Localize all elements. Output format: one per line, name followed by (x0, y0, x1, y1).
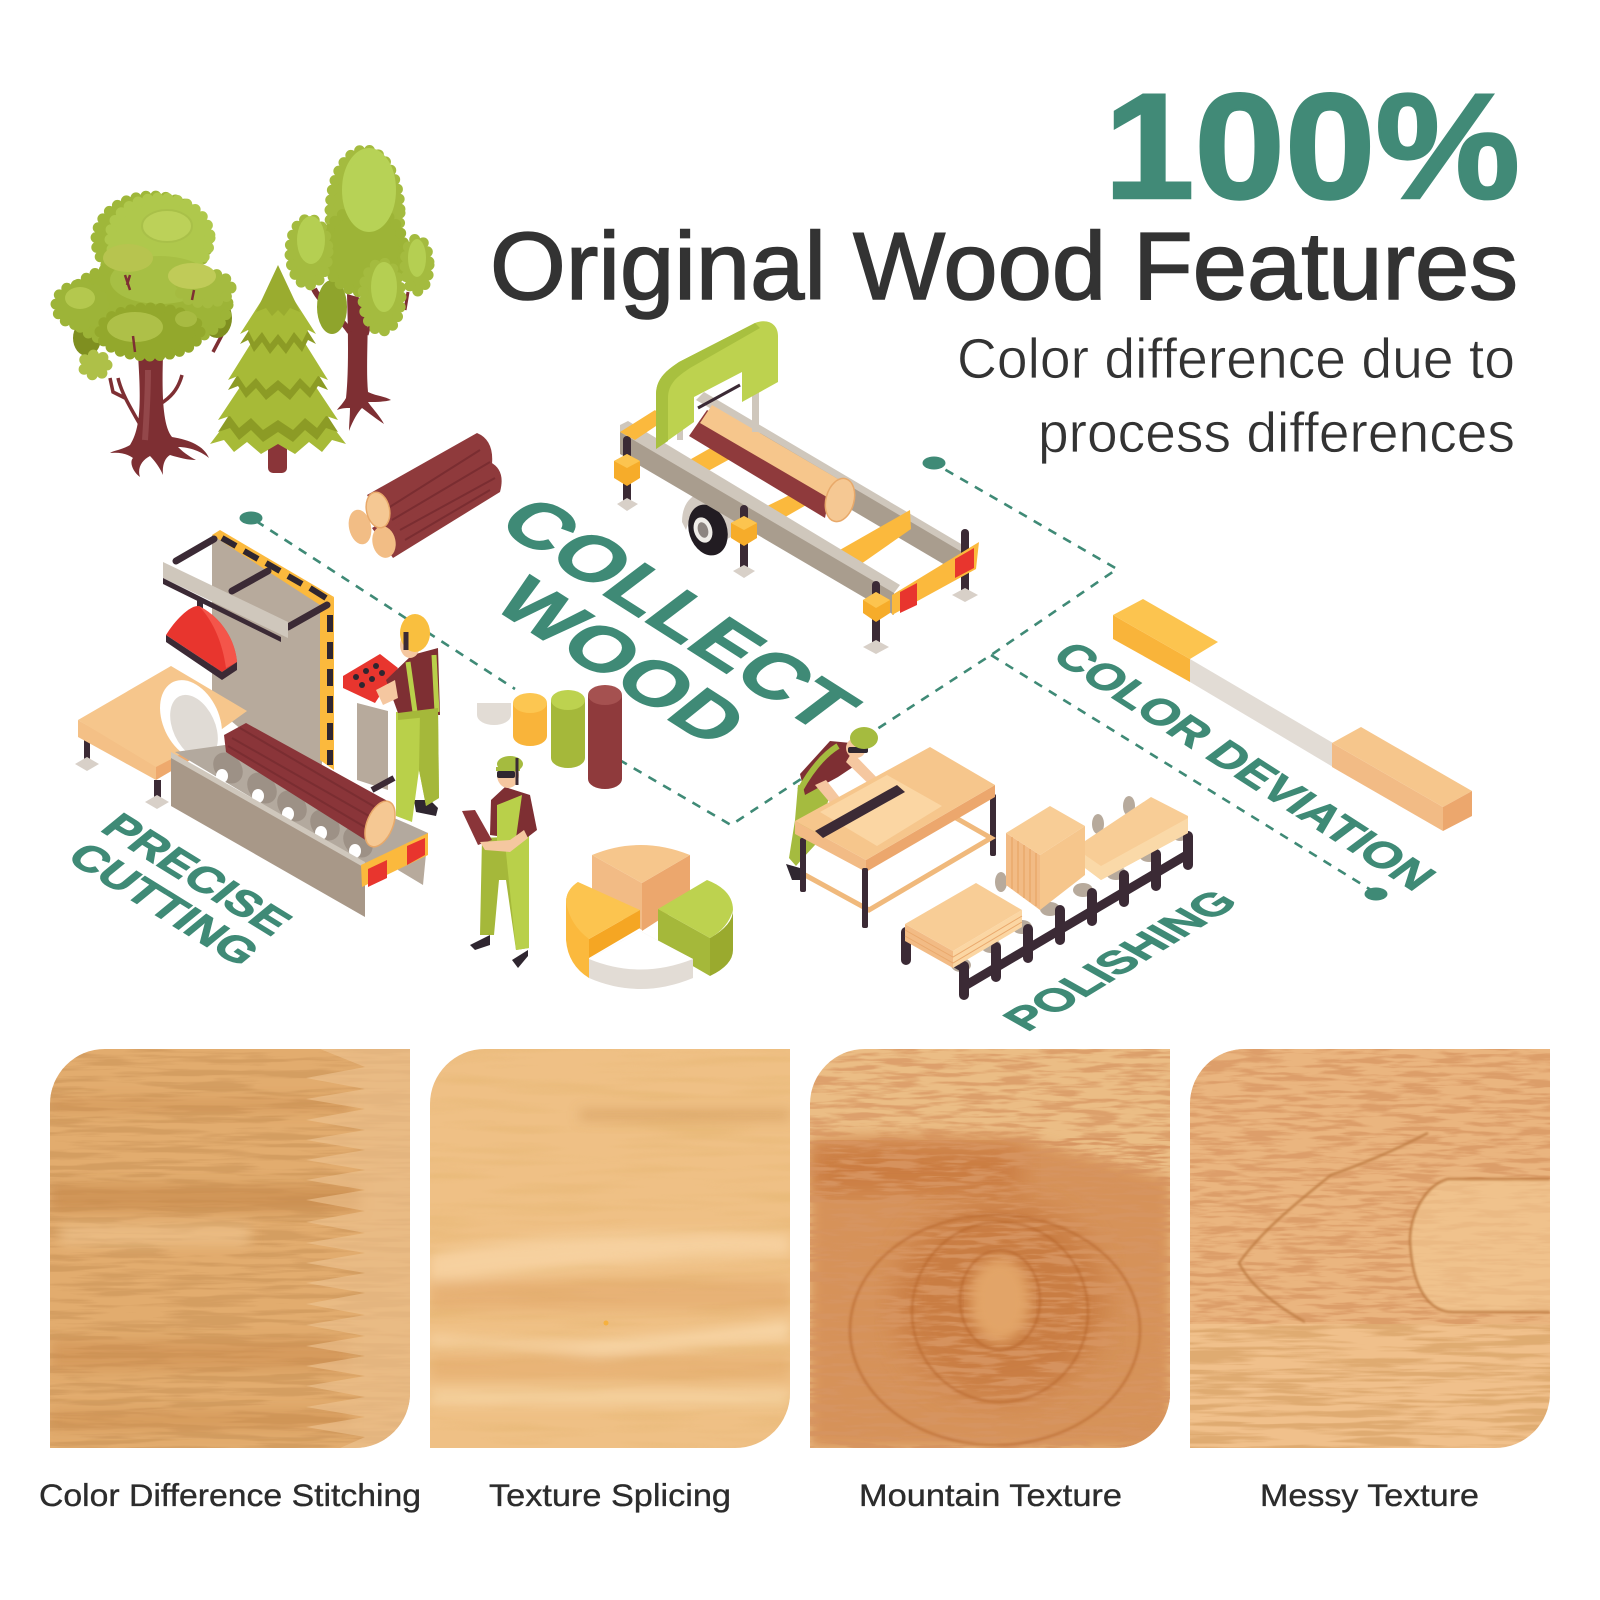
icon: inspector with clipboard (462, 756, 537, 968)
conveyor (398, 828, 428, 885)
icon: cutting machine (75, 530, 428, 917)
rear end panel (892, 542, 979, 615)
legs and brackets (623, 436, 631, 504)
tall stack (1006, 833, 1040, 910)
icon: stacked logs (346, 433, 502, 560)
icon: cylinder bars (477, 685, 622, 789)
subheading text: process differences (1038, 401, 1515, 465)
icon: colour deviation bar (1113, 599, 1472, 831)
tower (212, 535, 332, 795)
red hood (197, 600, 203, 614)
posts (677, 400, 683, 440)
panel: texture splicing (430, 1049, 790, 1448)
subheading text (957, 327, 1515, 465)
icon: back tree (290, 150, 429, 431)
icon: 3D pie chart (566, 845, 733, 989)
log on conveyor (224, 723, 393, 841)
panel: color difference stitching (50, 1049, 410, 1448)
label: precise cutting: CUTTING (58, 836, 269, 974)
icon: mobile sawmill (614, 321, 979, 654)
icon: worker at table (786, 727, 884, 880)
panel: messy texture (1190, 1049, 1550, 1448)
label: collect wood: COLLECT (481, 484, 877, 744)
caption: messy texture: Messy Texture (1260, 1477, 1479, 1513)
front rail (620, 430, 894, 615)
headline: 100%: 100% (1104, 62, 1520, 230)
caption: color difference stitching: Color Difference Stitching (39, 1477, 421, 1513)
log with plank (689, 410, 832, 518)
label: color deviation: COLOR DEVIATION (1042, 634, 1446, 898)
caption: texture splicing: Texture Splicing (489, 1477, 731, 1513)
planks (1085, 797, 1188, 880)
dashed connector path (240, 456, 1388, 900)
icon: board conveyor (905, 796, 1190, 995)
wheel (682, 492, 735, 540)
caption: mountain texture: Mountain Texture (859, 1477, 1122, 1513)
subheading text: Color difference due to (957, 327, 1515, 391)
label: precise cutting: PRECISE (92, 806, 301, 943)
icon: work table (795, 747, 996, 928)
green band arch (656, 321, 778, 449)
stacked board (905, 924, 953, 968)
icon: operator with control panel (343, 614, 440, 822)
label: collect wood: WOOD (478, 564, 766, 759)
icon: pine tree (210, 265, 346, 473)
heading: Original Wood Features: Original Wood Features (490, 213, 1518, 320)
icon: large tree (56, 196, 232, 477)
crossbars (684, 446, 730, 476)
table (84, 740, 90, 764)
rollers (951, 796, 1188, 972)
saw blade (148, 670, 234, 770)
overhead frame (176, 539, 327, 627)
label: polishing: POLISHING (992, 883, 1249, 1037)
panel: mountain texture (810, 1049, 1170, 1448)
